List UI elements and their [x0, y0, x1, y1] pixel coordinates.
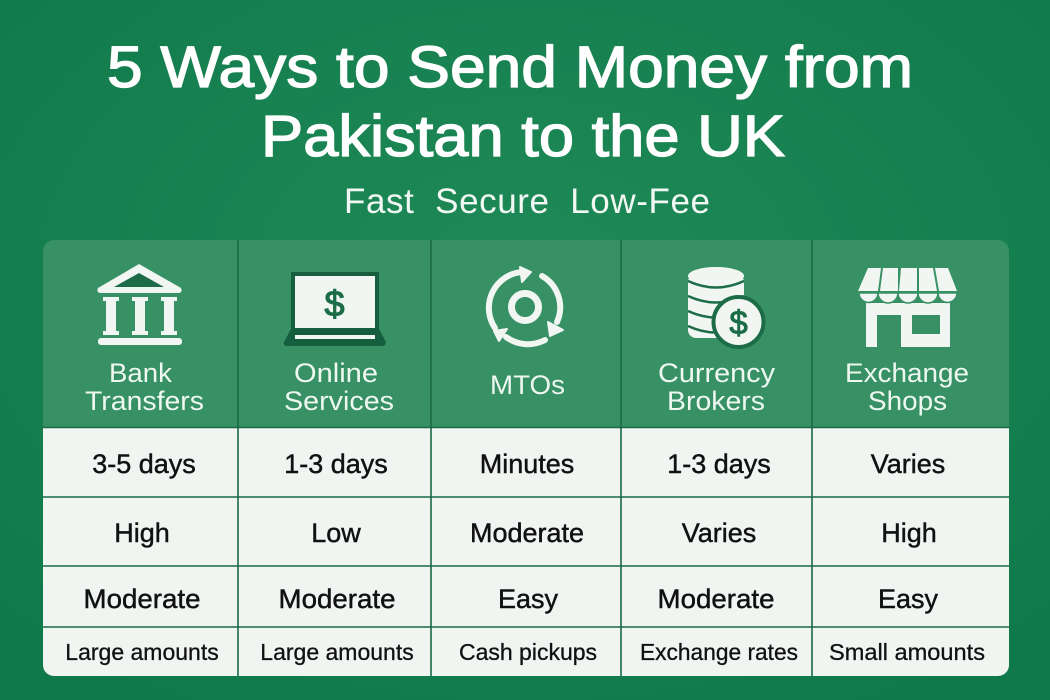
row 3: ease: Moderate	[84, 584, 200, 614]
row 3: ease: Moderate	[278, 584, 396, 614]
column headings: Services	[284, 386, 394, 416]
column headings: Exchange	[845, 358, 969, 388]
row 1: speed: 1-3 days	[284, 449, 388, 479]
column headings: Online	[294, 358, 378, 388]
subtitle: Fast Secure Low-Fee	[344, 182, 710, 221]
row 2: fees: High	[881, 518, 937, 548]
row 4: best for: Large amounts	[65, 639, 219, 665]
column headings: Brokers	[667, 386, 765, 416]
row 2: fees: Varies	[682, 518, 756, 548]
icon: shop	[858, 268, 957, 347]
title: Pakistan to the UK	[261, 104, 785, 169]
row 1: speed	[92, 449, 945, 479]
row 2: fees: Moderate	[470, 518, 584, 548]
row 4: best for: Small amounts	[829, 639, 985, 665]
column headings: Transfers	[85, 386, 204, 416]
row 1: speed: Minutes	[480, 449, 574, 479]
row 2: fees: Low	[311, 518, 361, 548]
row 1: speed: Varies	[871, 449, 945, 479]
column headings: Bank	[109, 358, 173, 388]
column headings: Shops	[868, 386, 947, 416]
icon: laptop with dollar	[284, 274, 386, 346]
row 4: best for: Large amounts	[260, 639, 414, 665]
table header band	[43, 240, 1009, 427]
row 3: ease: Easy	[498, 584, 559, 614]
row 1: speed: 3-5 days	[92, 449, 196, 479]
icon: bank	[97, 264, 182, 345]
row 4: best for: Cash pickups	[459, 639, 597, 665]
column headings: Currency	[658, 358, 776, 388]
icon: circular arrows	[489, 267, 563, 344]
row 2: fees: High	[114, 518, 170, 548]
row 3: ease	[84, 584, 939, 614]
icon: coin stack with dollar: $	[729, 304, 748, 341]
column headings	[85, 358, 969, 416]
row 3: ease: Moderate	[658, 584, 774, 614]
column headings: MTOs	[490, 370, 565, 400]
title	[107, 35, 913, 169]
icon: coin stack with dollar	[688, 267, 764, 347]
row 2: fees	[114, 518, 937, 548]
icon: laptop with dollar: $	[324, 283, 345, 324]
title: 5 Ways to Send Money from	[107, 35, 913, 100]
row 1: speed: 1-3 days	[667, 449, 771, 479]
comparison table	[43, 240, 1009, 676]
table body	[43, 427, 1009, 676]
row 4: best for	[65, 639, 985, 665]
row 3: ease: Easy	[878, 584, 939, 614]
row 4: best for: Exchange rates	[640, 639, 798, 665]
